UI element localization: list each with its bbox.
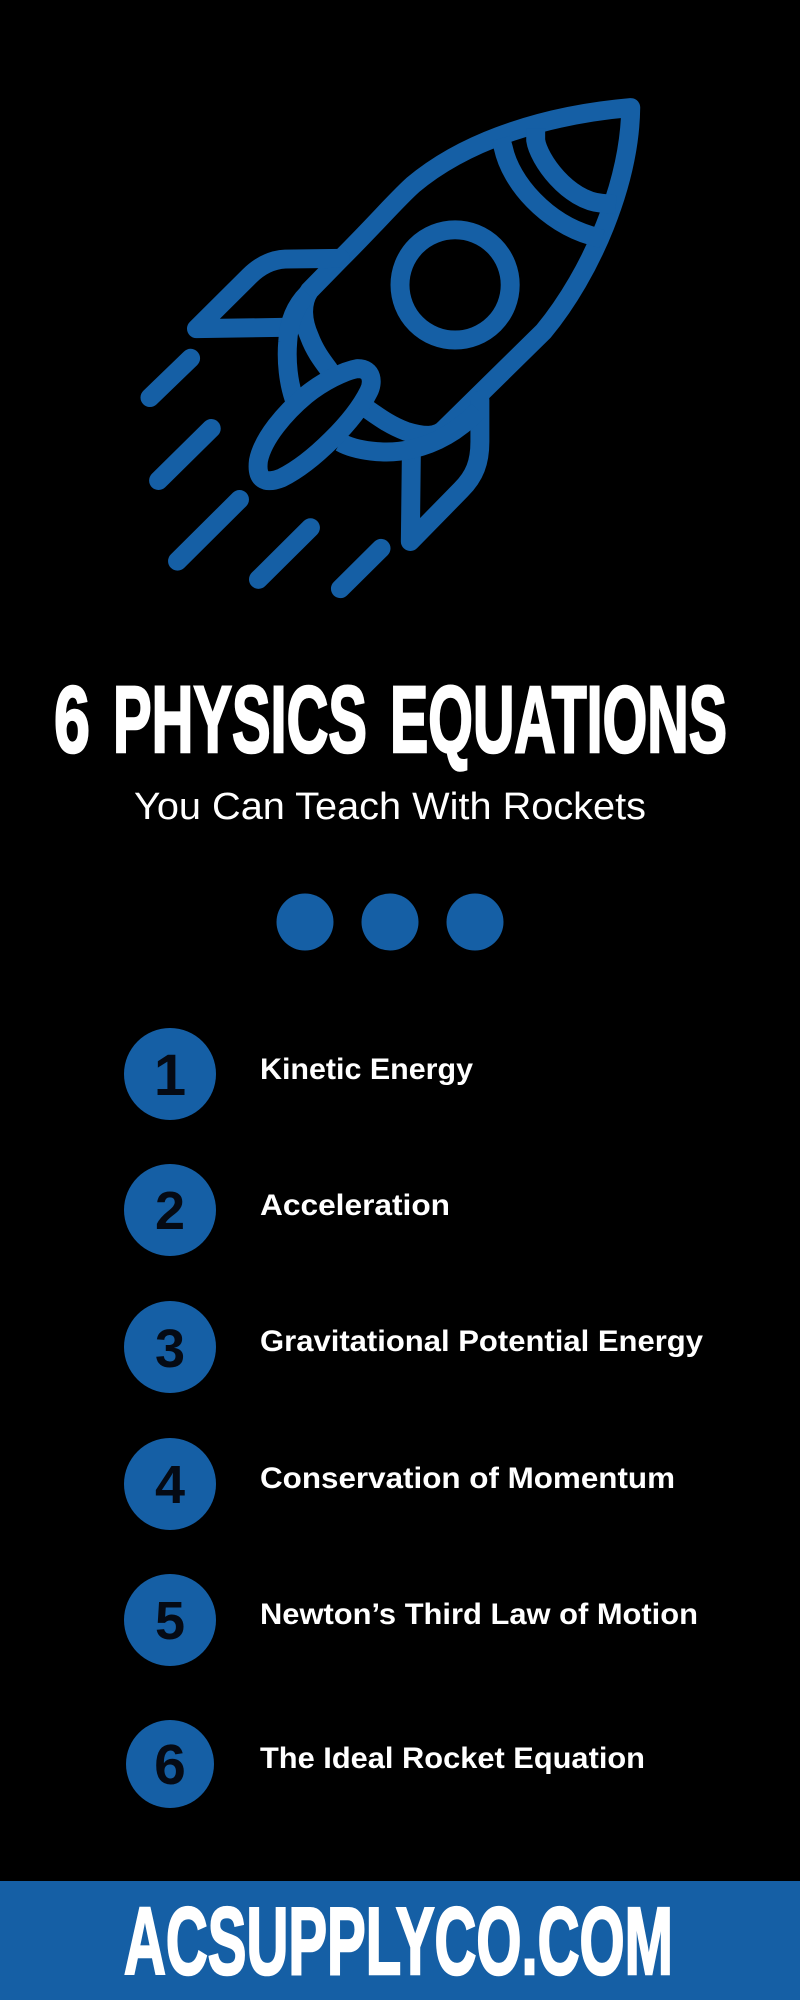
list item 3: 3 <box>155 1319 185 1379</box>
title: PHYSICS <box>113 667 367 773</box>
left fin <box>196 258 340 329</box>
subtitle: You Can Teach With Rockets <box>134 786 646 828</box>
nozzle <box>258 369 371 481</box>
icon: rocket <box>150 108 631 589</box>
list item 3 <box>124 1301 703 1393</box>
list item 4 <box>124 1438 675 1530</box>
list item 1: Kinetic Energy <box>260 1053 473 1086</box>
title: 6 <box>54 667 90 773</box>
list item 5: 5 <box>155 1591 185 1651</box>
rocket window <box>400 230 510 340</box>
list item 6: The Ideal Rocket Equation <box>260 1742 645 1775</box>
three dots <box>276 894 504 950</box>
list item 1: 1 <box>154 1043 186 1108</box>
list item 3: Gravitational Potential Energy <box>260 1325 703 1358</box>
right fin <box>410 400 480 541</box>
list item 5 <box>124 1574 698 1666</box>
list item 2: Acceleration <box>260 1189 450 1222</box>
list item 2 <box>124 1164 450 1256</box>
title <box>54 667 727 773</box>
rocket body <box>304 108 631 435</box>
exhaust lines <box>150 358 381 589</box>
list item 6: 6 <box>154 1733 186 1797</box>
list item 6 <box>126 1720 645 1808</box>
list item 4: Conservation of Momentum <box>260 1462 675 1495</box>
list item 4: 4 <box>155 1455 185 1515</box>
footer banner <box>0 1881 800 2000</box>
list item 2: 2 <box>155 1181 185 1241</box>
list item 5: Newton’s Third Law of Motion <box>260 1598 698 1631</box>
nose bands <box>501 128 616 239</box>
list item 1 <box>124 1028 473 1120</box>
engine ring <box>287 294 478 452</box>
